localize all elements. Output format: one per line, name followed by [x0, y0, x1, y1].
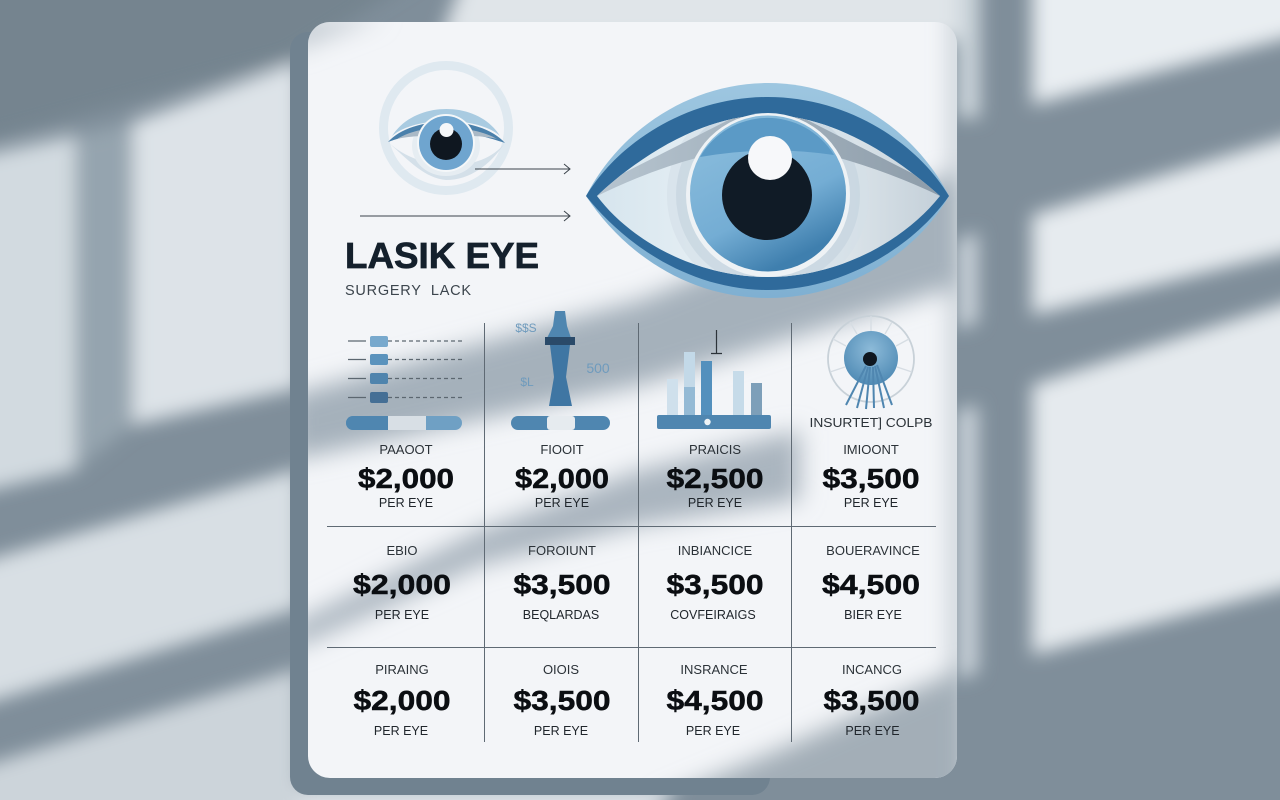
icon: bar chart: [657, 330, 771, 429]
icon: laser eye dial: [810, 316, 932, 430]
prices row 3: PER EYE: [534, 724, 588, 738]
prices row 3: $2,000: [354, 685, 450, 716]
icon: laser eye dial: INSURTET] COLPB: [810, 415, 932, 430]
icon: instrument tower: $L: [520, 375, 534, 389]
prices row 1: $2,000: [515, 463, 609, 494]
title: LASIK EYE: [345, 235, 539, 276]
prices row 3: PER EYE: [374, 724, 428, 738]
prices row 2: $3,500: [514, 569, 610, 600]
prices row 3: OIOIS: [543, 662, 579, 677]
prices row 2: $2,000: [353, 569, 451, 600]
arrow: from small eye: [475, 164, 570, 174]
prices row 1: $2,000: [358, 463, 454, 494]
prices row 3: $3,500: [514, 685, 610, 716]
prices row 3: PER EYE: [845, 724, 900, 738]
prices row 2: COVFEIRAIGS: [670, 608, 756, 622]
prices row 1: PER EYE: [535, 496, 589, 510]
prices row 2: $4,500: [822, 569, 920, 600]
icon: small eye with ring: [384, 66, 508, 190]
prices row 2: $3,500: [666, 569, 764, 600]
prices row 2: EBIO: [386, 543, 418, 558]
prices row 2: FOROIUNT: [528, 543, 596, 558]
prices row 2: BOUERAVINCE: [826, 543, 920, 558]
card drop shadow: [290, 32, 770, 795]
prices row 1: [358, 442, 920, 510]
panel: price card: [290, 0, 970, 800]
prices row 2: BEQLARDAS: [523, 608, 599, 622]
prices row 3: PIRAING: [375, 662, 429, 677]
icon: instrument tower: $$S: [515, 321, 537, 335]
prices row 3: INSRANCE: [680, 662, 748, 677]
prices row 2: BIER EYE: [844, 608, 902, 622]
prices row 2: INBIANCICE: [678, 543, 753, 558]
icon: instrument tower: [511, 311, 610, 430]
icon: large eye: [586, 83, 949, 298]
prices row 1: IMIOONT: [843, 442, 899, 457]
prices row 3: [354, 662, 920, 738]
prices row 3: $4,500: [666, 685, 764, 716]
prices row 1: $2,500: [666, 463, 764, 494]
icon: instrument tower: 500: [586, 360, 610, 376]
prices row 3: $3,500: [824, 685, 920, 716]
prices row 2: [353, 543, 920, 622]
prices row 1: PAAOOT: [379, 442, 433, 457]
subtitle: SURGERY LACK: [345, 283, 471, 299]
prices row 1: PER EYE: [844, 496, 898, 510]
prices row 3: INCANCG: [842, 662, 902, 677]
prices row 1: PER EYE: [688, 496, 742, 510]
prices row 1: $3,500: [822, 463, 920, 494]
grid lines: [327, 323, 936, 742]
prices row 1: FIOOIT: [540, 442, 584, 457]
prices row 1: PER EYE: [379, 496, 433, 510]
icon: slider rows: [346, 336, 462, 430]
arrow: under small eye: [360, 211, 570, 221]
prices row 1: PRAICIS: [689, 442, 741, 457]
prices row 2: PER EYE: [375, 608, 429, 622]
prices row 3: PER EYE: [686, 724, 740, 738]
